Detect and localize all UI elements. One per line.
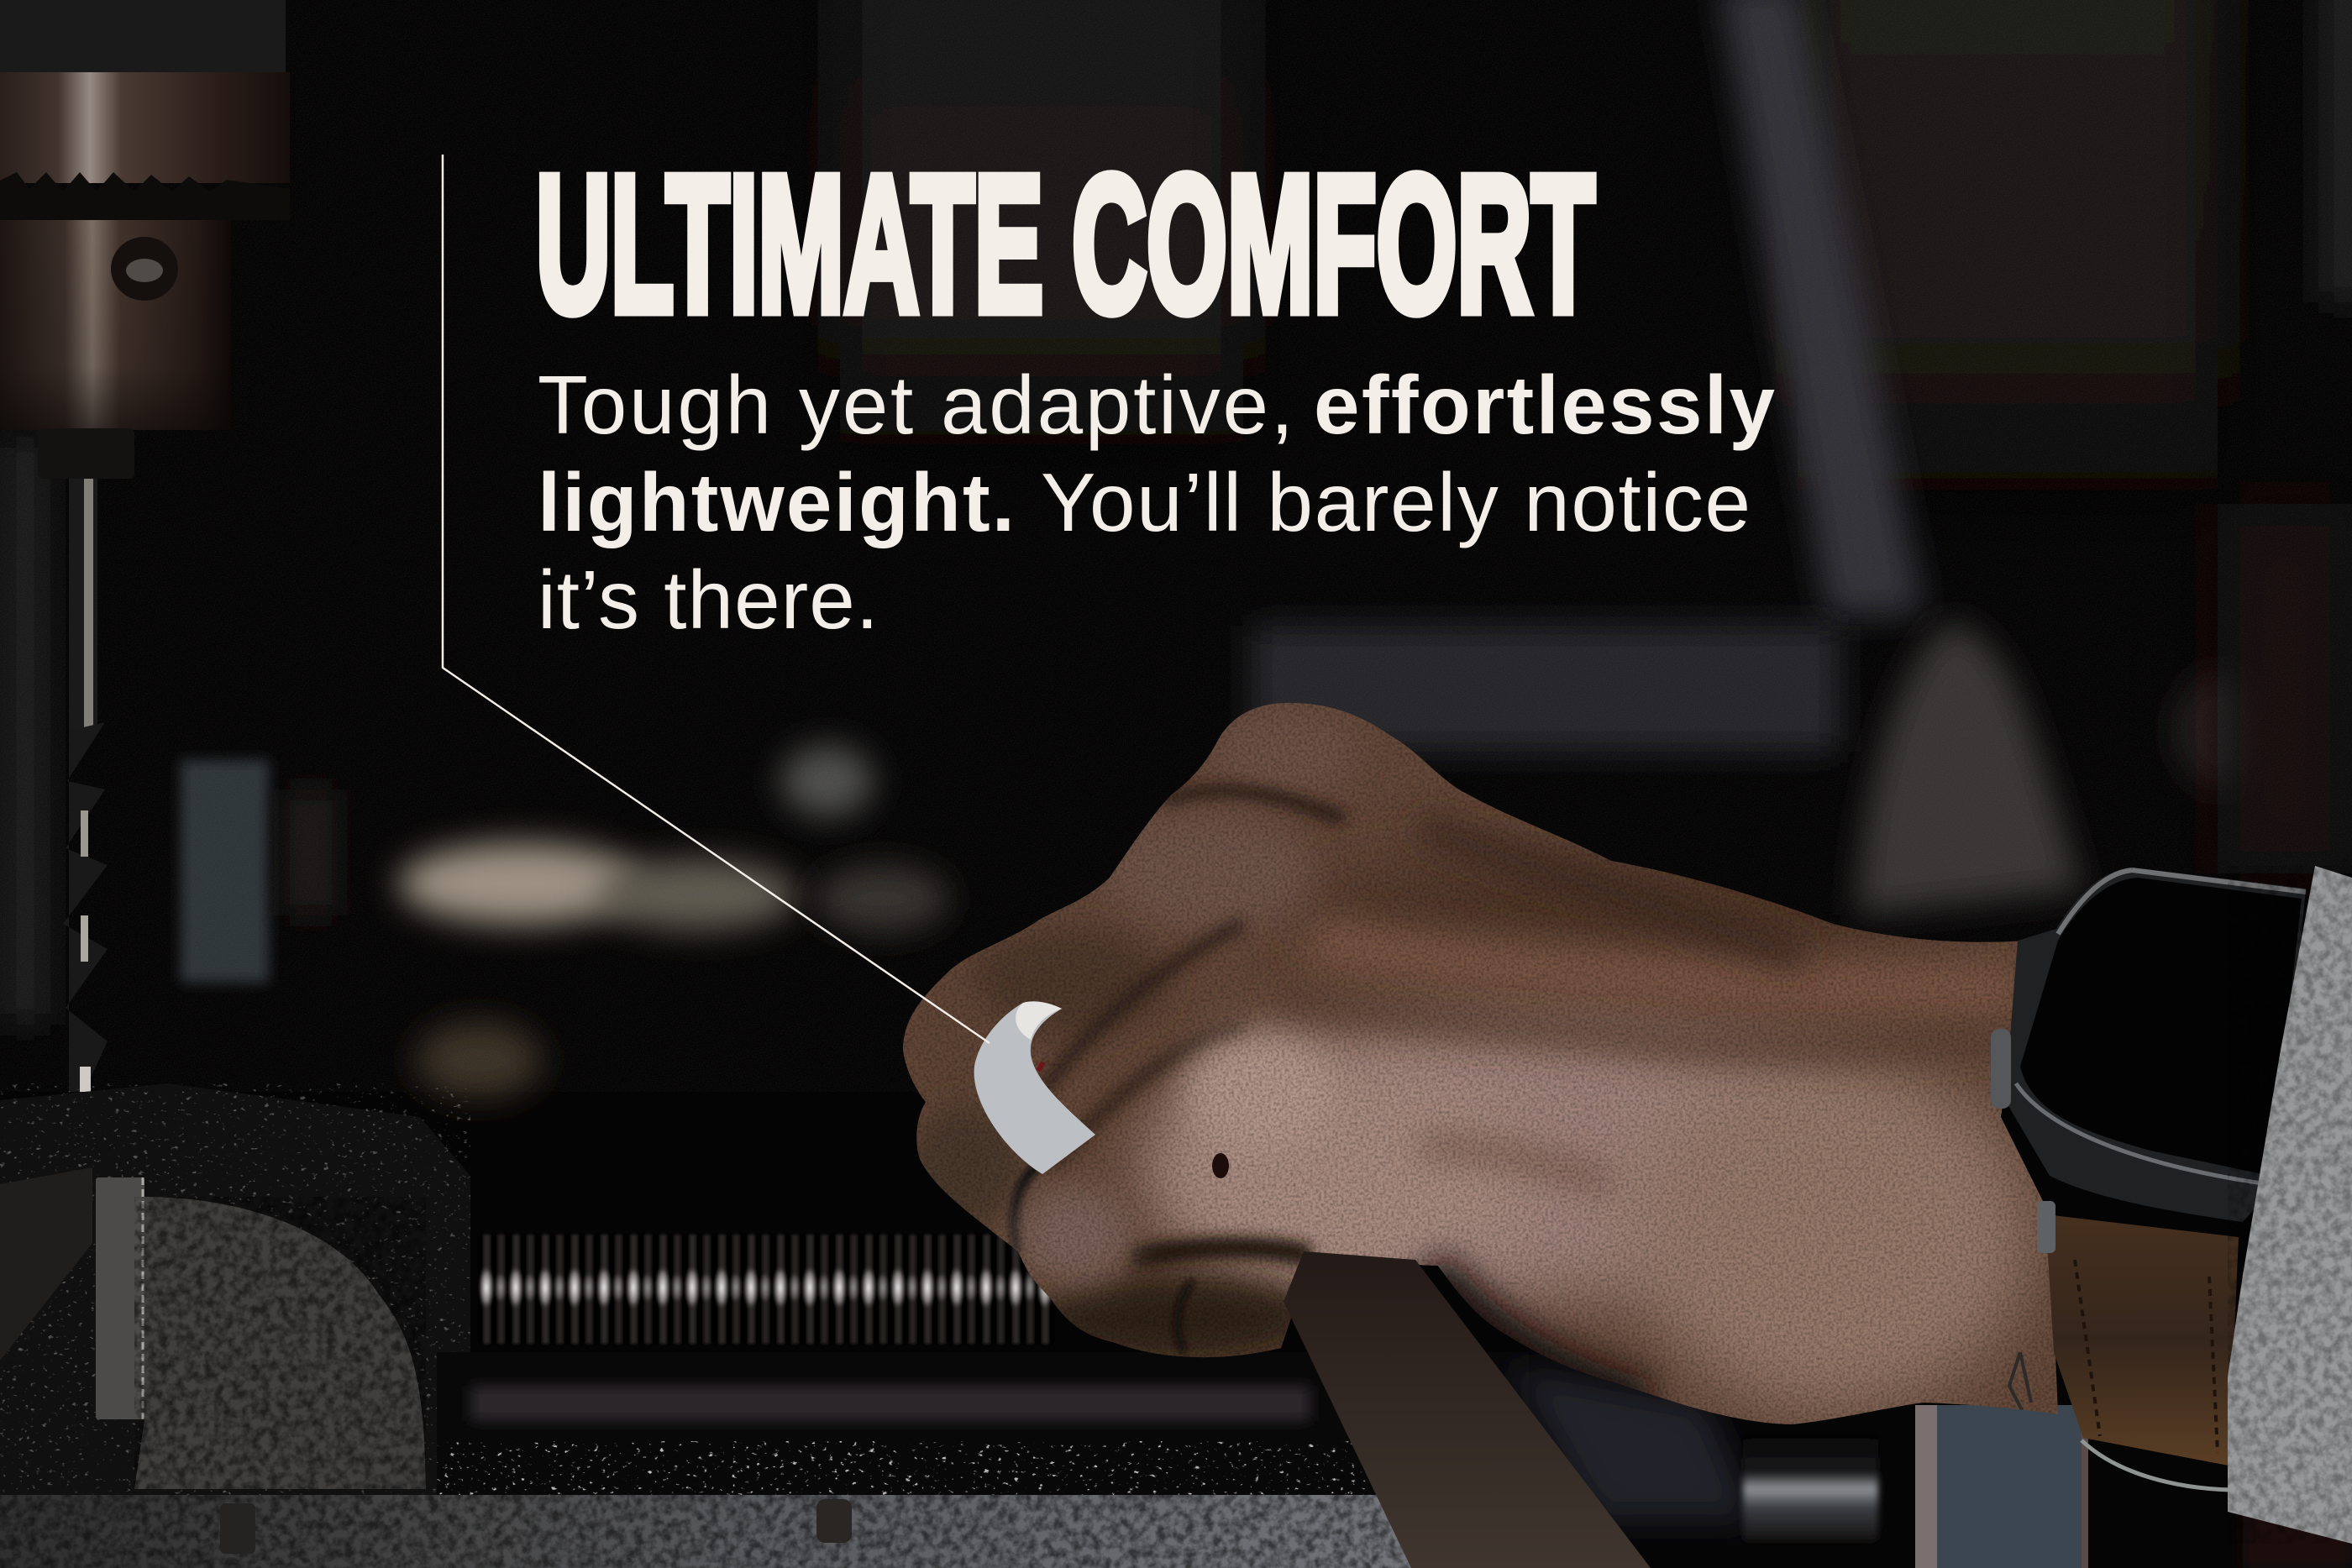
- drill chuck: [0, 0, 290, 479]
- vise jaw plate: [96, 1177, 144, 1419]
- shirt sleeve: [2228, 866, 2352, 1544]
- line 1: Tough yet adaptive,: [538, 359, 1294, 451]
- chipped bench surface: [437, 1352, 1529, 1497]
- vise nut: [1743, 1436, 1878, 1541]
- line 1: effortlessly: [1314, 359, 1775, 451]
- line 2: You’ll barely notice: [1041, 456, 1751, 548]
- bottom right hardware: [1509, 1352, 2352, 1568]
- lead screw: [479, 1235, 1054, 1344]
- base bolts: [816, 1499, 852, 1543]
- wrist tattoo: [2009, 1352, 2031, 1415]
- watch screen: [2020, 878, 2302, 1176]
- lower strap ring: [2082, 1440, 2230, 1490]
- small scratch: [1038, 1062, 1043, 1071]
- hand: [882, 689, 2075, 1428]
- line 2: lightweight.: [538, 456, 1015, 548]
- vise dome jaw: [134, 1197, 426, 1489]
- bench vise: [0, 1083, 1529, 1568]
- line 1: [538, 359, 1775, 451]
- white ring: [974, 1001, 1095, 1174]
- vise base: [0, 1495, 1411, 1568]
- metal bar in hand: [1284, 1251, 1651, 1568]
- smart watch: [1991, 868, 2306, 1490]
- callout leader line: [443, 155, 990, 1043]
- drill bit: [63, 479, 108, 1092]
- watch case: [2005, 868, 2306, 1222]
- clamp plate: [1915, 1405, 2088, 1568]
- body text: [538, 359, 1775, 646]
- line 2: [538, 456, 1751, 548]
- mole on hand: [1212, 1153, 1229, 1178]
- heading: ULTIMATE COMFORT: [536, 136, 1595, 353]
- line 3: it’s there.: [538, 553, 879, 646]
- fist shadow: [1016, 1184, 1319, 1361]
- watch strap: [2045, 1214, 2239, 1466]
- skin texture: [882, 689, 2075, 1428]
- watch crown: [1991, 1029, 2011, 1109]
- knuckles and fingers: [907, 710, 1357, 1251]
